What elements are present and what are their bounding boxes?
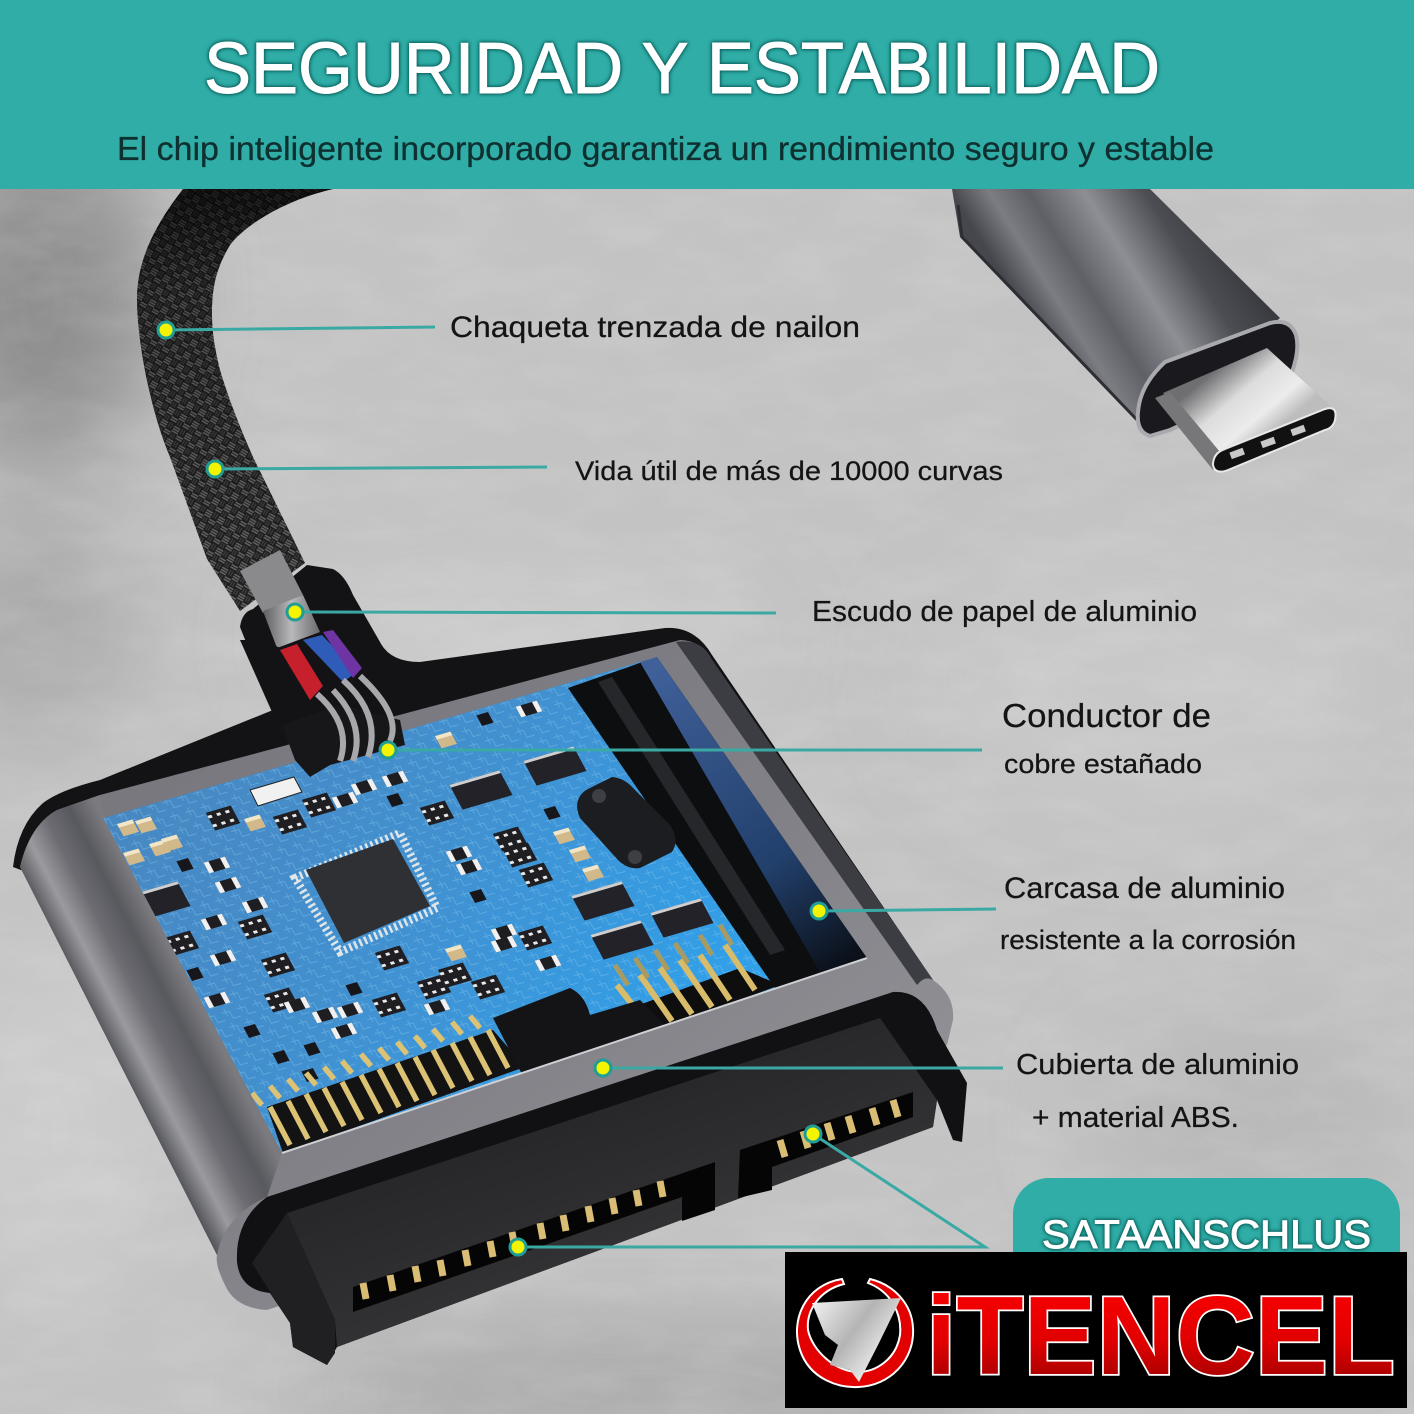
callout dots: [158, 322, 827, 1255]
SATA badge: SATAANSCHLUS: [1042, 1213, 1371, 1257]
striped connector: [250, 777, 302, 806]
labels: [450, 311, 1299, 1134]
labels: Vida útil de más de 10000 curvas: [575, 456, 1003, 486]
title: SEGURIDAD Y ESTABILIDAD: [204, 29, 1160, 109]
right dark band: [676, 641, 933, 985]
device body: [20, 640, 967, 1365]
subtitle: El chip inteligente incorporado garantiza un rendimiento seguro y estable: [117, 130, 1214, 167]
connector front face: [287, 1018, 937, 1347]
left rounded band: [20, 795, 282, 1255]
main chip: [295, 833, 437, 952]
connector pins: [363, 1100, 898, 1299]
black clip: [493, 988, 654, 1072]
plug metal tip: [1155, 348, 1336, 472]
gold pins: [252, 925, 780, 1153]
foil and wires: [240, 550, 405, 777]
labels: resistente a la corrosión: [1000, 925, 1296, 955]
labels: Conductor de: [1002, 697, 1211, 734]
labels: Cubierta de aluminio: [1016, 1049, 1299, 1081]
callout lines: [166, 327, 1003, 1247]
SATA connector: [237, 992, 967, 1365]
SATA badge: [1013, 1178, 1400, 1288]
header band: [0, 0, 1414, 189]
device shell: [13, 565, 933, 1100]
logo emblem: [797, 1279, 913, 1387]
logo: [785, 1252, 1407, 1408]
labels: + material ABS.: [1032, 1102, 1239, 1134]
labels: Chaqueta trenzada de nailon: [450, 311, 860, 344]
PCB window: [103, 657, 870, 1153]
small components: [117, 701, 714, 1082]
logo wordmark: iTENCEL: [926, 1274, 1395, 1398]
metal casing: [20, 640, 953, 1310]
labels: Carcasa de aluminio: [1004, 872, 1285, 905]
dark bracket: [568, 657, 870, 988]
braided cable: [137, 189, 333, 611]
labels: cobre estañado: [1004, 749, 1202, 779]
solder block: [282, 705, 405, 777]
mount block: [577, 777, 676, 868]
USB-C plug: [952, 189, 1336, 472]
connector slots: [353, 1162, 715, 1312]
labels: Escudo de papel de aluminio: [812, 596, 1197, 628]
